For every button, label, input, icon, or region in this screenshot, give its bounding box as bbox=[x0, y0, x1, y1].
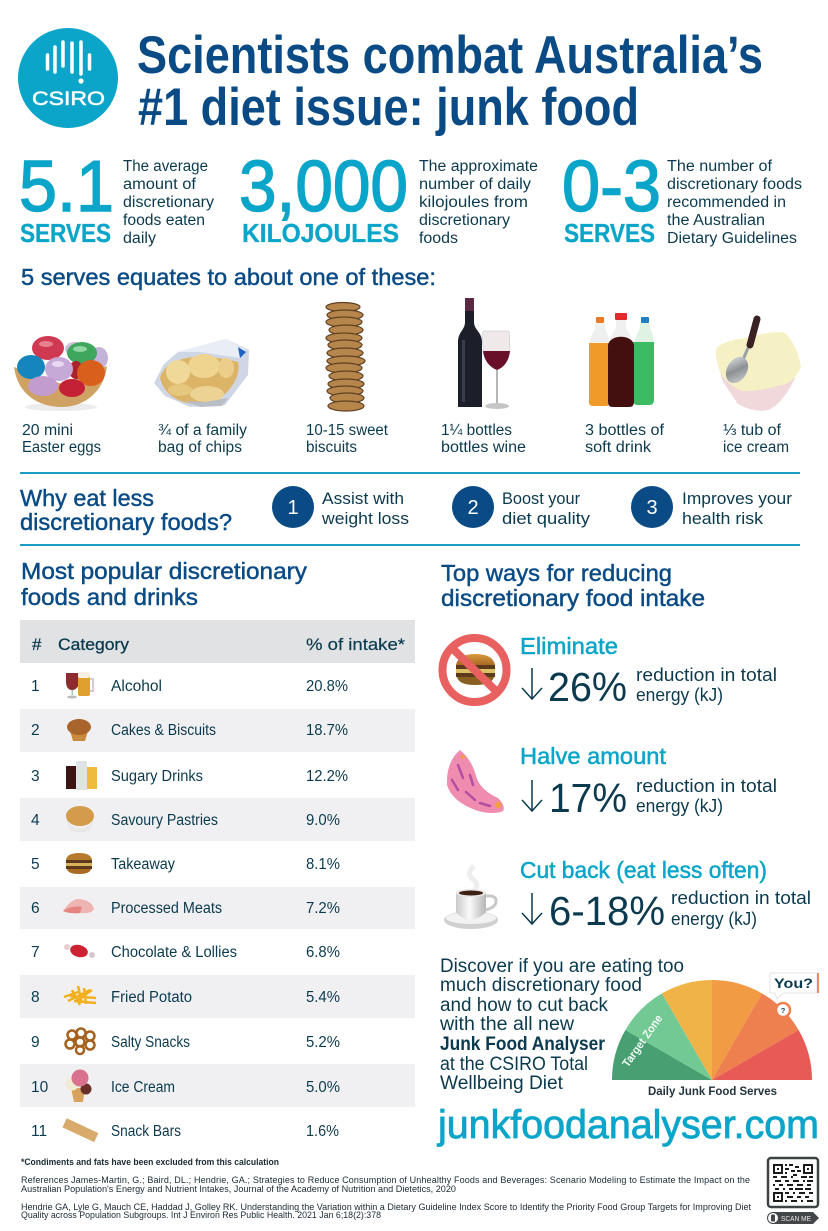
stat: 0-3 serves: Dietary Guidelines bbox=[667, 230, 797, 247]
heading: 5 serves equates: 5 serves equates to about one of these: bbox=[21, 264, 436, 290]
row: savoury pastries: 9.0% bbox=[306, 812, 340, 829]
tip: cut back bbox=[444, 857, 811, 934]
scan me label: SCAN ME bbox=[781, 1214, 811, 1223]
caption: Easter eggs bbox=[22, 439, 101, 456]
tip: cut back: energy (kJ) bbox=[671, 909, 757, 929]
row: chocolate and lollies bbox=[31, 943, 340, 961]
row: cakes and biscuits: 2 bbox=[31, 722, 40, 739]
reason 2: 2 bbox=[467, 497, 479, 519]
icon: basket of eggs bbox=[14, 336, 108, 411]
row: fried potato: 5.4% bbox=[306, 989, 340, 1006]
tip: eliminate bbox=[442, 633, 777, 710]
caption: bottles wine bbox=[441, 439, 526, 456]
heading: why eat less: discretionary foods? bbox=[20, 509, 232, 535]
row: sugary drinks bbox=[31, 761, 348, 790]
row: processed meats: 7.2% bbox=[306, 900, 340, 917]
row: savoury pastries: Savoury Pastries bbox=[111, 812, 218, 829]
stat: 3,000 kilojoules: 3,000 bbox=[239, 147, 408, 227]
heading: why eat less bbox=[20, 485, 232, 535]
row: takeaway: 5 bbox=[31, 856, 40, 873]
text: discover junk food analyser bbox=[439, 956, 684, 1094]
heading: why eat less: Why eat less bbox=[20, 485, 154, 511]
row: fried potato bbox=[31, 986, 340, 1006]
table: popular discretionary foods bbox=[20, 620, 415, 1142]
reason 3: 3 bbox=[646, 497, 658, 519]
stat: 3,000 kilojoules: discretionary bbox=[419, 212, 510, 229]
caption: 1¼ bottles bbox=[441, 422, 512, 439]
table header bbox=[20, 620, 415, 663]
row: snack bars: Snack Bars bbox=[111, 1123, 181, 1140]
row: alcohol: 1 bbox=[31, 678, 40, 695]
text: discover junk food analyser: Discover if you are eating too bbox=[440, 956, 684, 977]
row: takeaway bbox=[31, 853, 340, 874]
caption: bag of chips bbox=[158, 439, 242, 456]
caption bbox=[22, 422, 101, 456]
stat: 0-3 serves: the Australian bbox=[667, 212, 765, 229]
gauge: daily junk food serves: Daily Junk Food Serves bbox=[648, 1086, 777, 1098]
url: junkfoodanalyser.com: junkfoodanalyser.com bbox=[437, 1103, 819, 1147]
icon: bag of chips bbox=[154, 339, 249, 407]
icon: ice cream tub bbox=[716, 319, 801, 411]
stat: 3,000 kilojoules: The approximate bbox=[419, 158, 538, 175]
text: discover junk food analyser: and how to cut back bbox=[440, 995, 608, 1016]
row: snack bars bbox=[31, 1118, 339, 1142]
item: chips bbox=[154, 339, 249, 456]
stat: 5.1 serves: The average bbox=[123, 158, 208, 175]
row: sugary drinks: Sugary Drinks bbox=[111, 768, 203, 785]
row: takeaway: 8.1% bbox=[306, 856, 340, 873]
row: salty snacks: Salty Snacks bbox=[111, 1034, 190, 1051]
row: cakes and biscuits: Cakes & Biscuits bbox=[111, 722, 216, 739]
reason 1: 1 bbox=[287, 497, 299, 519]
icon: soft drink bottles bbox=[589, 313, 654, 407]
caption bbox=[723, 422, 789, 456]
stat: 5.1 serves: foods eaten bbox=[123, 212, 205, 229]
row: takeaway: Takeaway bbox=[111, 856, 175, 873]
tip: cut back: Cut back (eat less often) bbox=[520, 857, 767, 883]
callout: You?: ? bbox=[781, 1006, 786, 1015]
reason 1: weight loss bbox=[321, 509, 409, 528]
tip: eliminate: energy (kJ) bbox=[636, 685, 723, 705]
row: processed meats bbox=[31, 899, 340, 917]
stat: 5.1 serves: amount of bbox=[123, 176, 197, 193]
tip: halve amount: reduction in total bbox=[636, 776, 777, 796]
logo: CSIRO bbox=[18, 28, 118, 128]
reason 1 bbox=[272, 486, 409, 528]
row: ice cream: 5.0% bbox=[306, 1079, 340, 1096]
stat: 3,000 kilojoules: KILOJOULES bbox=[242, 218, 399, 248]
stat: 3,000 kilojoules bbox=[239, 147, 538, 248]
table header: % of intake* bbox=[306, 635, 405, 654]
icon: stack of biscuits bbox=[326, 302, 365, 411]
row: cakes and biscuits bbox=[31, 719, 348, 741]
caption bbox=[158, 422, 247, 456]
heading: most popular foods: foods and drinks bbox=[21, 584, 198, 610]
arrow bbox=[522, 780, 542, 811]
tip: eliminate: Eliminate bbox=[520, 633, 618, 659]
tip: cut back: 6-18% bbox=[549, 888, 665, 934]
caption: ice cream bbox=[723, 439, 789, 456]
text: discover junk food analyser: Junk Food Analyser bbox=[440, 1034, 606, 1055]
item: easter eggs bbox=[14, 336, 108, 456]
text: discover junk food analyser: Wellbeing Diet bbox=[440, 1073, 564, 1094]
tip: halve amount: energy (kJ) bbox=[636, 796, 723, 816]
stat: 5.1 serves: daily bbox=[123, 230, 156, 247]
references: References James-Martin, G.; Baird, DL.; Hendrie, GA.; Strategies to Reduce Consumption of Unhealthy Foods and Beverages: Scenario Modeling to Estimate the Impact on the bbox=[21, 1175, 750, 1185]
caption bbox=[441, 422, 526, 456]
stat: 3,000 kilojoules: foods bbox=[419, 230, 458, 247]
heading: top ways: discretionary food intake bbox=[441, 585, 705, 611]
row: savoury pastries bbox=[31, 806, 340, 832]
logo: CSIRO: CSIRO bbox=[32, 89, 105, 110]
row: salty snacks: 5.2% bbox=[306, 1034, 340, 1051]
row: salty snacks: 9 bbox=[31, 1034, 40, 1051]
tip: halve amount: 17% bbox=[549, 775, 627, 821]
caption: 3 bottles of bbox=[585, 422, 665, 439]
stat: 0-3 serves: discretionary foods bbox=[667, 176, 802, 193]
row: savoury pastries: 4 bbox=[31, 812, 40, 829]
row: alcohol bbox=[31, 672, 348, 698]
item: biscuits bbox=[306, 302, 389, 456]
row: snack bars: 11 bbox=[31, 1123, 47, 1140]
row: processed meats: Processed Meats bbox=[111, 900, 222, 917]
row: fried potato: Fried Potato bbox=[111, 989, 192, 1006]
tip: eliminate: reduction in total bbox=[636, 665, 777, 685]
item: soft drink bbox=[585, 313, 665, 456]
text: discover junk food analyser: at the CSIRO Total bbox=[440, 1054, 588, 1075]
title: #1 diet issue: junk food bbox=[138, 78, 639, 137]
stat: 0-3 serves: 0-3 bbox=[562, 147, 661, 227]
row: alcohol: 20.8% bbox=[306, 678, 348, 695]
gauge: daily junk food serves bbox=[612, 973, 819, 1098]
row: ice cream: 10 bbox=[31, 1079, 49, 1096]
qr code bbox=[767, 1158, 819, 1224]
row: chocolate and lollies: 6.8% bbox=[306, 944, 340, 961]
stat: 0-3 serves: recommended in bbox=[667, 194, 786, 211]
references: Hendrie GA, Lyle G, Mauch CE, Haddad J, Golley RK. Understanding the Variation within a Dietary Guideline Index Score to Identify the Priority Food Group Targets for Improving Diet bbox=[21, 1202, 751, 1212]
tip: cut back: reduction in total bbox=[671, 888, 811, 908]
text: discover junk food analyser: with the all new bbox=[439, 1014, 574, 1035]
reason 2: diet quality bbox=[502, 509, 591, 528]
stat: 5.1 serves: 5.1 bbox=[19, 147, 114, 227]
stat: 3,000 kilojoules: number of daily bbox=[419, 176, 531, 193]
row: ice cream: Ice Cream bbox=[111, 1079, 175, 1096]
stat: 0-3 serves: The number of bbox=[667, 158, 773, 175]
tip: eliminate: 26% bbox=[548, 664, 627, 710]
table header: Category bbox=[58, 635, 130, 654]
heading: top ways: Top ways for reducing bbox=[441, 560, 672, 586]
reason 3 bbox=[631, 486, 792, 528]
caption: biscuits bbox=[306, 439, 357, 456]
footnote: *Condiments and fats have been excluded from this calculation bbox=[21, 1157, 279, 1168]
row: sugary drinks: 3 bbox=[31, 768, 40, 785]
reason 2 bbox=[452, 486, 591, 528]
icon: coffee cup bbox=[444, 866, 498, 929]
icon: half donut bbox=[447, 750, 504, 813]
gauge: daily junk food serves: Target Zone bbox=[621, 1013, 665, 1070]
row: chocolate and lollies: Chocolate & Lollies bbox=[111, 944, 237, 961]
row: sugary drinks: 12.2% bbox=[306, 768, 348, 785]
stat: 0-3 serves: SERVES bbox=[564, 218, 655, 248]
tip: halve amount bbox=[447, 743, 777, 821]
stat: 0-3 serves bbox=[562, 147, 802, 248]
row: cakes and biscuits: 18.7% bbox=[306, 722, 348, 739]
heading: most popular foods: Most popular discretionary bbox=[21, 558, 308, 584]
item: ice cream bbox=[716, 319, 801, 456]
row: salty snacks bbox=[31, 1028, 340, 1054]
stat: 5.1 serves bbox=[19, 147, 214, 248]
reason 3: Improves your bbox=[682, 489, 792, 508]
row: fried potato: 8 bbox=[31, 989, 40, 1006]
row: chocolate and lollies: 7 bbox=[31, 944, 40, 961]
item: wine bbox=[441, 298, 526, 456]
icon: no burger bbox=[442, 638, 506, 702]
icon: wine bottle and glass bbox=[458, 298, 510, 409]
caption: 10-15 sweet bbox=[306, 422, 389, 439]
callout: You? bbox=[770, 973, 819, 1017]
title bbox=[137, 26, 763, 137]
caption: ¾ of a family bbox=[158, 422, 247, 439]
row: ice cream bbox=[31, 1070, 340, 1102]
row: processed meats: 6 bbox=[31, 900, 40, 917]
arrow bbox=[522, 893, 542, 924]
row: snack bars: 1.6% bbox=[306, 1123, 339, 1140]
stat: 5.1 serves: SERVES bbox=[20, 218, 111, 248]
row: alcohol: Alcohol bbox=[111, 678, 162, 695]
references bbox=[21, 1175, 751, 1220]
heading: most popular foods bbox=[21, 558, 308, 610]
text: discover junk food analyser: much discretionary food bbox=[440, 975, 642, 996]
caption bbox=[585, 422, 665, 456]
reason 1: Assist with bbox=[322, 489, 404, 508]
arrow bbox=[522, 668, 542, 699]
caption: ⅓ tub of bbox=[723, 422, 782, 439]
caption bbox=[306, 422, 389, 456]
stat: 3,000 kilojoules: kilojoules from bbox=[419, 194, 528, 211]
caption: soft drink bbox=[585, 439, 651, 456]
references: Australian Population's Energy and Nutrient Intakes, Journal of the Academy of Nutrition and Dietetics, 2020 bbox=[21, 1184, 456, 1194]
caption: 20 mini bbox=[22, 422, 73, 439]
reason 3: health risk bbox=[682, 509, 764, 528]
callout: You?: You? bbox=[774, 975, 813, 991]
heading: top ways bbox=[441, 560, 705, 611]
table header: # bbox=[32, 635, 42, 654]
reason 2: Boost your bbox=[502, 489, 580, 508]
references: Quality across Population Subgroups. Int J Environ Res Public Health. 2021 Jan 6;18(2):378 bbox=[21, 1210, 381, 1220]
stat: 5.1 serves: discretionary bbox=[123, 194, 214, 211]
tip: halve amount: Halve amount bbox=[520, 743, 667, 769]
